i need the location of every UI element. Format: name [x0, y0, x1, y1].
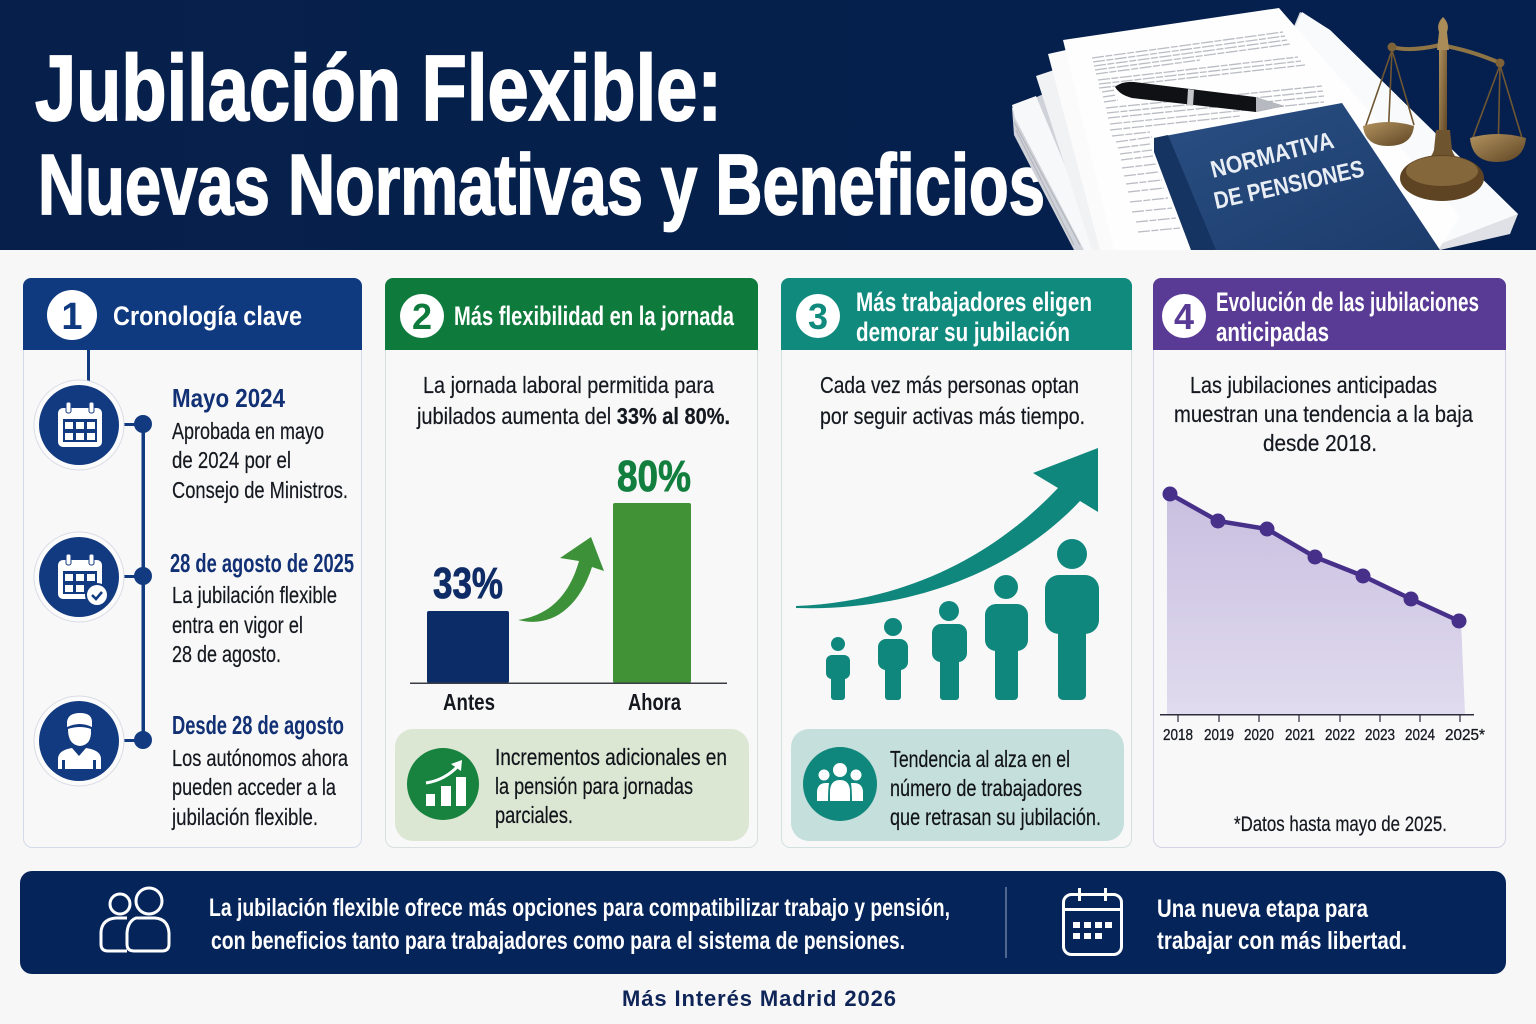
footer credit: Más Interés Madrid 2026	[622, 986, 896, 1011]
banner main message: con beneficios tanto para trabajadores como para el sistema de pensiones.	[211, 927, 905, 955]
timeline line	[87, 350, 152, 749]
callout: tendencia al alza: que retrasan su jubilación.	[890, 804, 1101, 830]
icon: calendar outline	[1063, 888, 1122, 954]
area line chart 2018-2025: 2018	[1163, 727, 1193, 744]
banner main message: La jubilación flexible ofrece más opciones para compatibilizar trabajo y pensión,	[209, 894, 950, 922]
banner side message: Una nueva etapa para	[1157, 895, 1369, 923]
callout: tendencia al alza: Tendencia al alza en el	[890, 746, 1070, 772]
book: Normativa de pensiones	[1154, 103, 1440, 250]
area line chart 2018-2025: 2021	[1285, 727, 1315, 744]
panel 1: cronología clave	[23, 278, 362, 848]
area line chart 2018-2025: 2025*	[1445, 727, 1485, 744]
area line chart 2018-2025: 2024	[1405, 727, 1435, 744]
callout: incrementos adicionales: parciales.	[495, 802, 573, 828]
book: Normativa de pensiones: NORMATIVA	[1208, 127, 1337, 184]
footnote: *Datos hasta mayo de 2025.	[1234, 813, 1447, 836]
panel 4 intro text: desde 2018.	[1263, 430, 1377, 456]
milestone: 28 de agosto de 2025	[170, 548, 354, 667]
panel 1 heading	[23, 278, 362, 350]
panel 4 heading: 4	[1174, 296, 1194, 337]
panel 3 intro text	[820, 372, 1085, 429]
panel 3 intro text: Cada vez más personas optan	[820, 372, 1079, 398]
panel 4 intro text: Las jubilaciones anticipadas	[1190, 372, 1437, 398]
panel 3: demorar la jubilación	[781, 278, 1132, 848]
bar chart: 33% vs 80%: 33%	[433, 559, 503, 608]
bar chart: 33% vs 80%	[410, 452, 727, 715]
panel 1 heading: Cronología clave	[113, 301, 302, 331]
milestone: Desde 28 de agosto: Desde 28 de agosto	[172, 710, 344, 740]
panel 2 heading	[385, 278, 758, 350]
panel 4 intro text	[1174, 372, 1473, 456]
banner main message	[209, 894, 950, 955]
panel 3 heading: Más trabajadores eligen	[856, 287, 1092, 317]
bar chart: 33% vs 80%: Antes	[443, 689, 495, 715]
area line chart 2018-2025: 2023	[1365, 727, 1395, 744]
callout: incrementos adicionales: Incrementos adicionales en	[495, 744, 727, 770]
milestone: 28 de agosto de 2025: entra en vigor el	[172, 612, 303, 638]
milestone: Desde 28 de agosto: Los autónomos ahora	[172, 745, 348, 771]
milestone: Mayo 2024: Mayo 2024	[172, 383, 285, 413]
milestone: 28 de agosto de 2025: La jubilación flexible	[172, 582, 337, 608]
panel 4 heading	[1153, 278, 1506, 350]
panel 2 heading: 2	[412, 296, 432, 337]
paper text lines	[1092, 32, 1324, 232]
banner side message: trabajar con más libertad.	[1157, 927, 1407, 955]
arrow: increase	[518, 537, 604, 622]
panel 3 heading: 3	[808, 296, 828, 337]
bar chart: 33% vs 80%: 80%	[617, 452, 691, 501]
icon: calendar	[34, 380, 124, 470]
panel 2 heading: Más flexibilidad en la jornada	[454, 301, 735, 331]
milestone: Desde 28 de agosto: pueden acceder a la	[172, 774, 336, 800]
panel 3 heading: demorar su jubilación	[856, 317, 1070, 347]
bar chart: 33% vs 80%: Ahora	[628, 689, 681, 715]
panel 3 intro text: por seguir activas más tiempo.	[820, 403, 1085, 429]
icon: self-employed worker	[34, 696, 124, 786]
panel 1 heading: 1	[61, 296, 83, 338]
title	[35, 36, 1045, 233]
milestone: 28 de agosto de 2025: 28 de agosto.	[172, 641, 281, 667]
milestone: Mayo 2024: Aprobada en mayo	[172, 418, 324, 444]
area line chart 2018-2025: 2020	[1244, 727, 1274, 744]
icon: two people outline	[101, 888, 169, 951]
book: Normativa de pensiones: DE PENSIONES	[1211, 155, 1367, 215]
panel 4 intro text: muestran una tendencia a la baja	[1174, 401, 1473, 427]
panel 4 heading: anticipadas	[1216, 317, 1329, 347]
milestone: Desde 28 de agosto: jubilación flexible.	[171, 804, 318, 830]
callout: incrementos adicionales	[395, 729, 749, 841]
area line chart 2018-2025: 2019	[1204, 727, 1234, 744]
panel 2 intro text	[416, 372, 730, 429]
illustration: documents, pen, book and scales	[1012, 8, 1526, 250]
milestone: Mayo 2024: Consejo de Ministros.	[172, 477, 348, 503]
area line chart 2018-2025	[1160, 486, 1485, 744]
people icons growing in size	[826, 539, 1099, 700]
milestone: Desde 28 de agosto	[171, 710, 348, 830]
panel 2 intro text: jubilados aumenta del 33% al 80%.	[416, 403, 730, 429]
title: Jubilación Flexible:	[35, 36, 722, 140]
panel 3 heading	[781, 278, 1132, 350]
scales	[1363, 17, 1526, 201]
milestone: 28 de agosto de 2025: 28 de agosto de 2025	[170, 548, 354, 578]
callout: incrementos adicionales: la pensión para jornadas	[495, 773, 693, 799]
pen	[1115, 82, 1284, 112]
arrow: rising trend	[796, 448, 1098, 608]
banner side message	[1157, 895, 1407, 955]
callout: tendencia al alza: número de trabajadores	[890, 775, 1082, 801]
panel 2 intro text: La jornada laboral permitida para	[423, 372, 714, 398]
title: Nuevas Normativas y Beneficios	[38, 138, 1045, 233]
area line chart 2018-2025: 2022	[1325, 727, 1355, 744]
panel 2: flexibilidad	[385, 278, 758, 848]
callout: tendencia al alza	[791, 729, 1124, 841]
milestone: Mayo 2024: de 2024 por el	[172, 447, 291, 473]
bottom banner	[20, 871, 1506, 974]
milestone: Mayo 2024	[172, 383, 348, 503]
panel 4: jubilaciones anticipadas	[1153, 278, 1506, 848]
header band	[0, 0, 1536, 250]
icon: calendar with check	[34, 532, 124, 622]
